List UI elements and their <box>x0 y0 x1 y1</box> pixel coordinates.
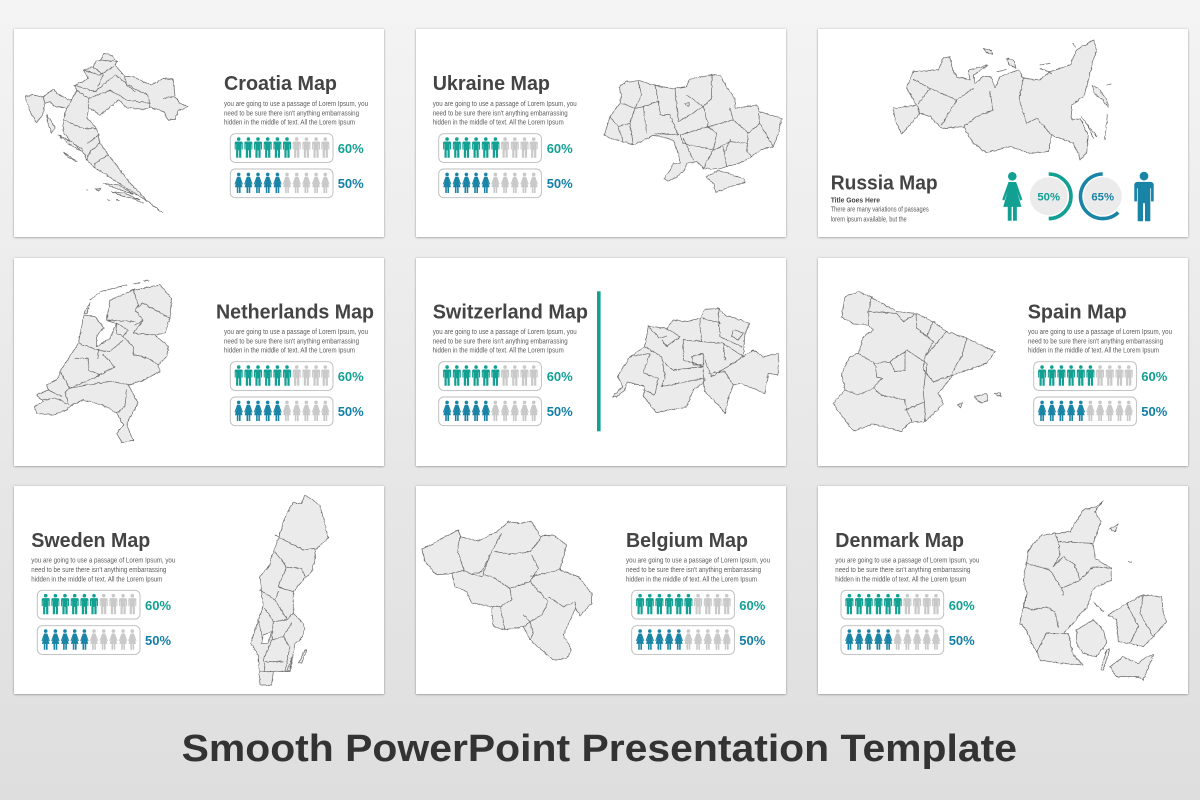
value 50%: 50% <box>547 176 573 191</box>
heading: Netherlands Map <box>216 301 374 323</box>
panel: Croatia <box>14 29 384 237</box>
value 60%: 60% <box>949 598 975 613</box>
text block: hidden in the middle of text. All the Lorem Ipsum <box>433 120 564 127</box>
text block: need to be sure there isn't anything embarrassing <box>1028 338 1163 345</box>
map: Belgium <box>422 522 592 660</box>
heading: Denmark Map <box>835 530 964 552</box>
pictogram bar 50% <box>632 626 734 654</box>
text block: need to be sure there isn't anything embarrassing <box>224 110 359 117</box>
value 60%: 60% <box>1141 369 1168 384</box>
text block: hidden in the middle of text. All the Lorem Ipsum <box>31 576 162 583</box>
pictogram bar 60% <box>37 590 140 619</box>
value 50%: 50% <box>338 176 364 191</box>
heading: Spain Map <box>1028 301 1127 323</box>
text block <box>224 329 368 355</box>
map: Russia <box>893 40 1112 160</box>
icon: man <box>1134 172 1154 221</box>
map: Sweden <box>251 495 328 685</box>
text block: hidden in the middle of text. All the Lorem Ipsum <box>835 576 966 583</box>
panel: Russia <box>818 29 1188 237</box>
donut: 65%: 65% <box>1091 191 1114 203</box>
map: Spain <box>833 292 1001 432</box>
map: Ukraine <box>604 75 782 192</box>
title: Smooth PowerPoint Presentation Template <box>182 728 1017 770</box>
value 60%: 60% <box>547 369 573 384</box>
text block <box>835 558 979 583</box>
pictogram bar 50% <box>1034 397 1136 426</box>
pictogram bar 50% <box>37 626 140 654</box>
text block: you are going to use a passage of Lorem Ipsum, you <box>433 101 577 108</box>
pictogram bar 50% <box>841 626 944 654</box>
pictogram bar 60% <box>632 590 734 619</box>
subtitle: Title Goes Here <box>831 197 880 204</box>
text block: need to be sure there isn't anything embarrassing <box>626 567 761 574</box>
value 60%: 60% <box>338 369 364 384</box>
pictogram bar 60% <box>439 362 541 390</box>
pictogram bar 60% <box>1034 362 1136 390</box>
text block <box>433 101 577 127</box>
pictogram bar 60% <box>230 134 333 162</box>
text block: you are going to use a passage of Lorem Ipsum, you <box>224 329 368 336</box>
text block <box>1028 329 1172 355</box>
value 50%: 50% <box>1141 404 1168 419</box>
text block: you are going to use a passage of Lorem Ipsum, you <box>224 101 368 108</box>
text block: lorem ipsum available, but the <box>831 216 907 223</box>
value 50%: 50% <box>739 633 766 648</box>
value 60%: 60% <box>739 598 766 613</box>
value 60%: 60% <box>547 141 573 156</box>
text block: need to be sure there isn't anything embarrassing <box>433 338 568 345</box>
text block: hidden in the middle of text. All the Lorem Ipsum <box>224 120 355 127</box>
value 50%: 50% <box>547 404 573 419</box>
panel: Denmark <box>818 486 1188 694</box>
panel: Spain <box>818 258 1188 466</box>
value 50%: 50% <box>338 404 364 419</box>
donut: 50% <box>1030 174 1071 219</box>
text block: need to be sure there isn't anything embarrassing <box>835 567 970 574</box>
text block: need to be sure there isn't anything embarrassing <box>224 338 359 345</box>
text block: There are many variations of passages <box>831 207 929 214</box>
vertical accent bar <box>597 291 601 431</box>
text block: you are going to use a passage of Lorem Ipsum, you <box>1028 329 1172 336</box>
donut: 65% <box>1080 174 1122 219</box>
value 50%: 50% <box>949 633 975 648</box>
pictogram bar 60% <box>439 134 541 162</box>
text block: you are going to use a passage of Lorem Ipsum, you <box>31 558 175 565</box>
text block: you are going to use a passage of Lorem Ipsum, you <box>626 558 770 565</box>
map: Croatia <box>25 53 188 213</box>
text block <box>433 329 577 355</box>
map: Netherlands <box>34 281 172 443</box>
text block: you are going to use a passage of Lorem Ipsum, you <box>835 558 979 565</box>
panel: Belgium <box>416 486 786 694</box>
panel: Ukraine <box>416 29 786 237</box>
value 60%: 60% <box>338 141 364 156</box>
panel: Sweden <box>14 486 384 694</box>
text block: need to be sure there isn't anything embarrassing <box>433 110 568 117</box>
heading: Sweden Map <box>31 530 150 552</box>
pictogram bar 60% <box>841 590 944 619</box>
map: Denmark <box>1020 501 1167 680</box>
heading: Russia Map <box>831 172 938 194</box>
value 60%: 60% <box>145 598 171 613</box>
text block <box>831 207 929 223</box>
text block <box>31 558 175 583</box>
heading: Belgium Map <box>626 530 748 552</box>
pictogram bar 50% <box>439 169 541 198</box>
heading: Switzerland Map <box>433 301 588 323</box>
value 50%: 50% <box>145 633 171 648</box>
text block: hidden in the middle of text. All the Lorem Ipsum <box>626 576 757 583</box>
text block <box>626 558 770 583</box>
map: Switzerland <box>612 308 778 413</box>
text block: need to be sure there isn't anything embarrassing <box>31 567 166 574</box>
heading: Croatia Map <box>224 73 337 95</box>
pictogram bar 50% <box>439 397 541 426</box>
text block: you are going to use a passage of Lorem Ipsum, you <box>433 329 577 336</box>
text block: hidden in the middle of text. All the Lorem Ipsum <box>1028 348 1159 355</box>
pictogram bar 60% <box>230 362 333 390</box>
heading: Ukraine Map <box>433 73 550 95</box>
panel: Netherlands <box>14 258 384 466</box>
icon: woman <box>1002 172 1022 221</box>
pictogram bar 50% <box>230 169 333 198</box>
pictogram bar 50% <box>230 397 333 426</box>
panel: Switzerland <box>416 258 786 466</box>
donut: 50%: 50% <box>1037 191 1060 203</box>
text block: hidden in the middle of text. All the Lorem Ipsum <box>224 348 355 355</box>
text block <box>224 101 368 127</box>
text block: hidden in the middle of text. All the Lorem Ipsum <box>433 348 564 355</box>
